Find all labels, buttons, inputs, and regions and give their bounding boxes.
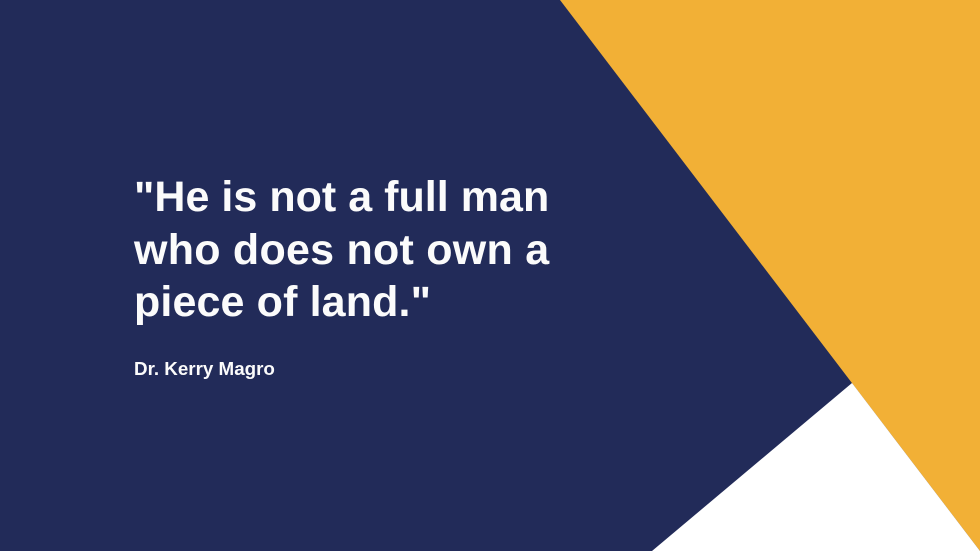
quote text — [134, 173, 550, 326]
attribution: Dr. Kerry Magro — [134, 358, 275, 379]
quote text: piece of land." — [134, 278, 431, 326]
quote text: who does not own a — [134, 226, 549, 274]
quote text: "He is not a full man — [134, 173, 549, 221]
